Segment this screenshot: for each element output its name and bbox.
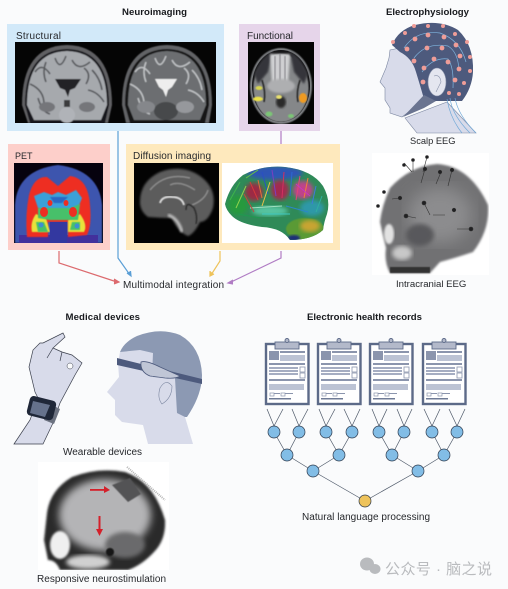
- arrow: PET to integration: [59, 251, 119, 284]
- label: natural language processing: Natural language processing: [302, 512, 430, 523]
- label: wearable devices: Wearable devices: [63, 447, 142, 458]
- panel: diffusion imaging: [126, 144, 340, 250]
- arrow: diffusion to integration: [210, 251, 220, 276]
- image: PET scan: [14, 163, 103, 243]
- arrow: functional to integration: [228, 131, 281, 284]
- panel: structural: [7, 24, 224, 131]
- arrow: structural to integration: [118, 131, 131, 276]
- image: diffusion grayscale brain: [134, 163, 219, 243]
- icon: scalp EEG head: [380, 23, 476, 133]
- label: multimodal integration: Multimodal integration: [123, 280, 224, 291]
- diagram: natural language processing tree: [267, 409, 465, 507]
- panel: functional: [239, 24, 320, 131]
- label: PET: PET: [15, 151, 33, 161]
- label: functional: Functional: [247, 31, 293, 42]
- watermark: 公众号 · 脑之说: [385, 561, 492, 578]
- label: structural: Structural: [16, 31, 61, 42]
- label: intracranial EEG: Intracranial EEG: [396, 279, 466, 290]
- icon: head with headband device: [107, 331, 202, 444]
- image: responsive neurostimulation x-ray: [38, 462, 169, 570]
- heading: electronic health records: Electronic health records: [307, 312, 422, 323]
- image: functional MRI scan: [248, 42, 314, 124]
- label: responsive neurostimulation: Responsive neurostimulation: [37, 574, 166, 585]
- heading: medical devices: Medical devices: [66, 312, 140, 323]
- watermark: [360, 558, 492, 578]
- heading: Neuroimaging: Neuroimaging: [122, 7, 187, 18]
- icon: wrist with wearable watch: [14, 333, 82, 444]
- arrow: red vertical: [96, 516, 103, 536]
- panel: PET: [8, 144, 110, 250]
- image: intracranial EEG x-ray: [372, 153, 489, 275]
- label: scalp EEG: Scalp EEG: [410, 136, 455, 146]
- image: structural MRI scans: [15, 42, 216, 123]
- image: diffusion tractography brain: [222, 163, 333, 243]
- heading: electrophysiology: Electrophysiology: [386, 7, 470, 18]
- arrow: red horizontal: [90, 486, 110, 493]
- icons: clipboards: [266, 338, 466, 404]
- label: diffusion imaging: Diffusion imaging: [133, 151, 211, 162]
